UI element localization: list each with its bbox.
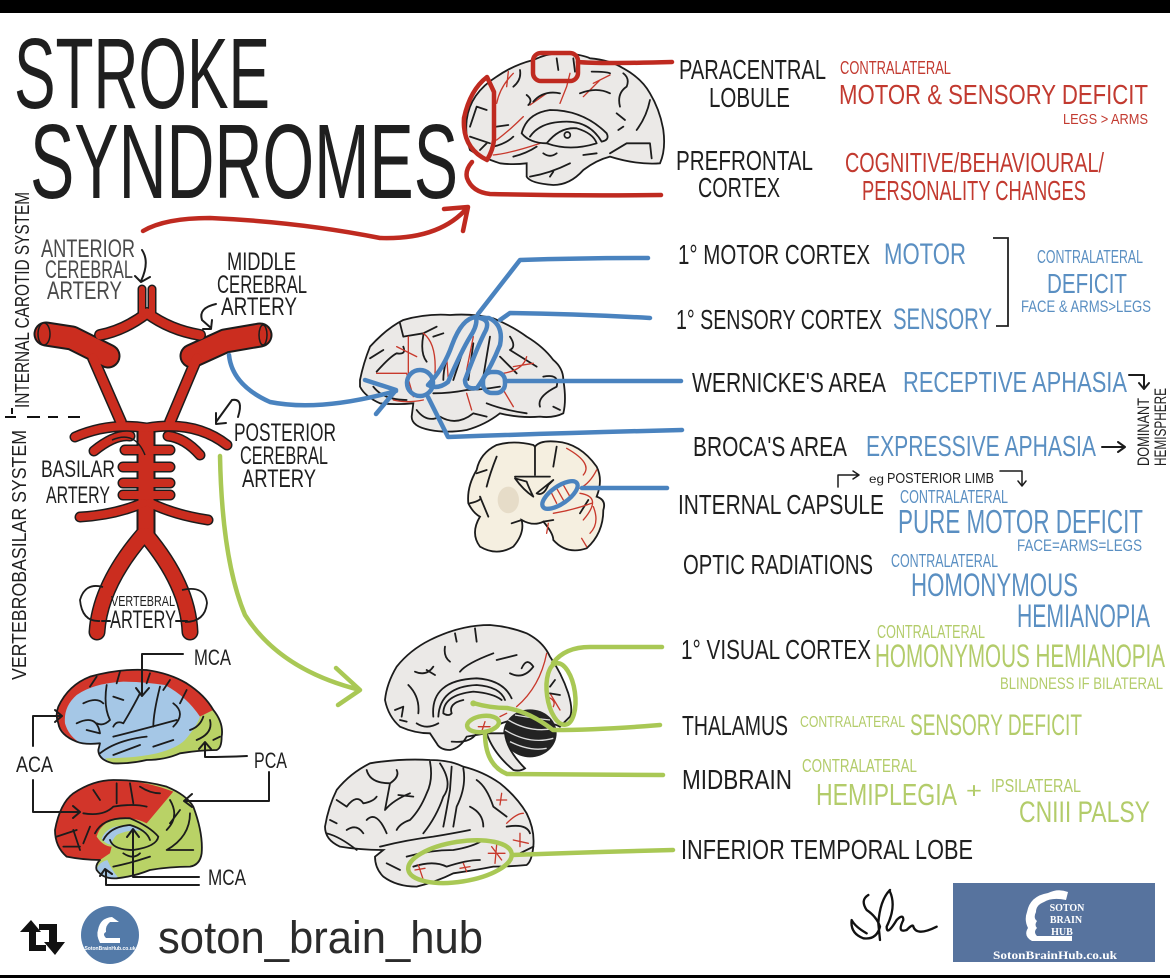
artery label: middle cerebral xyxy=(201,248,307,329)
note: dominant hemisphere: DOMINANT xyxy=(1134,398,1153,466)
artery label: basilar: ARTERY xyxy=(46,482,110,509)
callout line: internal capsule xyxy=(582,486,667,490)
title: SYNDROMES xyxy=(30,103,458,221)
row: primary visual cortex: CONTRALATERAL xyxy=(877,622,985,642)
logo: Soton Brain Hub: BRAIN xyxy=(1050,915,1083,926)
artery label: vertebral: VERTEBRAL xyxy=(111,593,175,610)
artery label: posterior cerebral: POSTERIOR xyxy=(234,419,336,447)
logo: Soton Brain Hub: HUB xyxy=(1051,927,1073,938)
logo: Soton Brain Hub: SOTON xyxy=(1050,903,1085,914)
artery label: middle cerebral: MIDDLE xyxy=(227,248,296,276)
row: prefrontal cortex xyxy=(676,145,1104,206)
artery label: anterior cerebral xyxy=(41,235,150,305)
arrow: posterior circulation xyxy=(220,456,360,705)
row: thalamus: THALAMUS xyxy=(682,710,788,741)
row: midbrain: CONTRALATERAL xyxy=(802,756,917,776)
arrow: anterior circulation xyxy=(143,207,468,238)
title: STROKE xyxy=(14,18,270,130)
side label: vertebrobasilar system: VERTEBROBASILAR SYSTEM xyxy=(9,430,31,680)
artery label: middle cerebral: ARTERY xyxy=(221,293,297,321)
row: optic radiations: HOMONYMOUS xyxy=(911,567,1078,603)
artery label: vertebral xyxy=(102,593,187,634)
artery label: anterior cerebral: ANTERIOR xyxy=(41,235,135,263)
note: dominant hemisphere xyxy=(1134,388,1170,466)
artery label: anterior cerebral: ARTERY xyxy=(47,277,122,305)
bottom black bar xyxy=(0,975,1170,978)
artery label: basilar: BASILAR xyxy=(41,456,115,483)
artery label: posterior cerebral: ARTERY xyxy=(242,465,316,493)
title xyxy=(14,18,458,221)
territory brain: medial view xyxy=(55,780,202,878)
artery label: anterior cerebral: CEREBRAL xyxy=(45,256,133,284)
callout lines: paracentral and prefrontal red circles xyxy=(464,53,672,195)
row: primary visual cortex xyxy=(681,622,1165,693)
label: PCA: PCA xyxy=(254,748,287,773)
callout lines: visual cortex, thalamus, midbrain xyxy=(466,647,663,775)
note: posterior limb: POSTERIOR LIMB xyxy=(887,470,994,487)
top black bar xyxy=(0,0,1170,13)
logo: Soton Brain Hub: SotonBrainHub.co.uk xyxy=(993,950,1118,962)
row: midbrain: MIDBRAIN xyxy=(682,764,792,795)
note: dominant hemisphere: HEMISPHERE xyxy=(1151,388,1170,466)
signature xyxy=(851,890,937,940)
row: primary motor cortex: 1° MOTOR CORTEX xyxy=(678,239,870,270)
note: contralateral deficit: DEFICIT xyxy=(1047,268,1127,299)
artery label: posterior cerebral xyxy=(216,400,336,493)
row: paracentral lobule: LOBULE xyxy=(709,82,790,113)
artery label: vertebral: ARTERY xyxy=(110,606,176,634)
account name: soton_brain_hub xyxy=(158,912,483,963)
row: Broca's area: BROCA'S AREA xyxy=(693,431,847,462)
row: Wernicke's area xyxy=(692,367,1149,399)
label: MCA bottom: MCA xyxy=(208,865,246,890)
diagram: circle of Willis arteries xyxy=(38,289,267,632)
note: contralateral deficit xyxy=(1021,247,1151,316)
brain: PCA medial view xyxy=(385,625,571,771)
row: paracentral lobule xyxy=(679,54,1148,128)
label: ACA xyxy=(16,710,80,818)
icon: repost xyxy=(20,920,65,955)
row: midbrain: + xyxy=(966,778,982,803)
artery label: middle cerebral: CEREBRAL xyxy=(217,271,307,299)
row: inferior temporal lobe: INFERIOR TEMPORAL LOBE xyxy=(681,834,973,865)
row: primary motor cortex: MOTOR xyxy=(884,238,966,271)
row: midbrain: HEMIPLEGIA xyxy=(816,777,957,812)
note: posterior limb xyxy=(838,470,1026,487)
row: Wernicke's area: WERNICKE'S AREA xyxy=(692,367,886,398)
brain: lateral view inferior temporal xyxy=(325,760,534,890)
logo: Soton Brain Hub xyxy=(953,883,1155,962)
row: paracentral lobule: CONTRALATERAL xyxy=(840,58,951,78)
row: prefrontal cortex: CORTEX xyxy=(698,172,780,203)
row: paracentral lobule: PARACENTRAL xyxy=(679,54,826,85)
artery label: basilar xyxy=(41,456,115,509)
row: optic radiations: CONTRALATERAL xyxy=(891,551,998,571)
row: thalamus xyxy=(682,709,1082,742)
row: primary sensory cortex: 1° SENSORY CORTEX xyxy=(676,304,882,335)
row: optic radiations: OPTIC RADIATIONS xyxy=(683,549,873,580)
row: midbrain: IPSILATERAL xyxy=(991,776,1081,796)
row: internal capsule: CONTRALATERAL xyxy=(900,487,1008,507)
label: MCA top: MCA xyxy=(194,645,231,670)
system divider xyxy=(5,408,80,417)
note: posterior limb: eg xyxy=(869,472,884,486)
side label: internal carotid system: INTERNAL CAROTID SYSTEM xyxy=(12,192,34,408)
avatar: Soton Brain Hub: SotonBrainHub.co.uk xyxy=(84,946,136,952)
row: Broca's area xyxy=(693,431,1125,463)
label: MCA bottom xyxy=(100,829,246,890)
row: internal capsule xyxy=(678,487,1143,555)
row: primary visual cortex: 1° VISUAL CORTEX xyxy=(681,634,871,665)
bracket xyxy=(993,238,1008,326)
row: paracentral lobule: LEGS > ARMS xyxy=(1063,111,1148,128)
row: prefrontal cortex: PREFRONTAL xyxy=(676,145,813,176)
row: primary sensory cortex: SENSORY xyxy=(893,303,992,336)
brain: coronal section xyxy=(468,441,604,552)
row: midbrain xyxy=(682,756,1150,829)
label: PCA xyxy=(184,742,287,807)
row: optic radiations xyxy=(683,549,1150,634)
callout line: inferior temporal lobe xyxy=(512,850,673,855)
callout lines: motor, sensory, Wernicke, Broca xyxy=(407,258,682,437)
row: internal capsule: INTERNAL CAPSULE xyxy=(678,489,884,520)
label: ACA: ACA xyxy=(16,752,53,777)
brain: anterior circulation medial view xyxy=(466,53,664,185)
label: MCA top xyxy=(136,645,231,696)
brain: MCA lateral view xyxy=(360,315,565,432)
avatar: Soton Brain Hub xyxy=(81,906,139,964)
row: thalamus: CONTRALATERAL xyxy=(800,714,905,731)
artery label: posterior cerebral: CEREBRAL xyxy=(240,442,328,470)
territory brain: lateral view xyxy=(57,670,222,763)
arrow: middle cerebral circulation xyxy=(229,355,396,414)
